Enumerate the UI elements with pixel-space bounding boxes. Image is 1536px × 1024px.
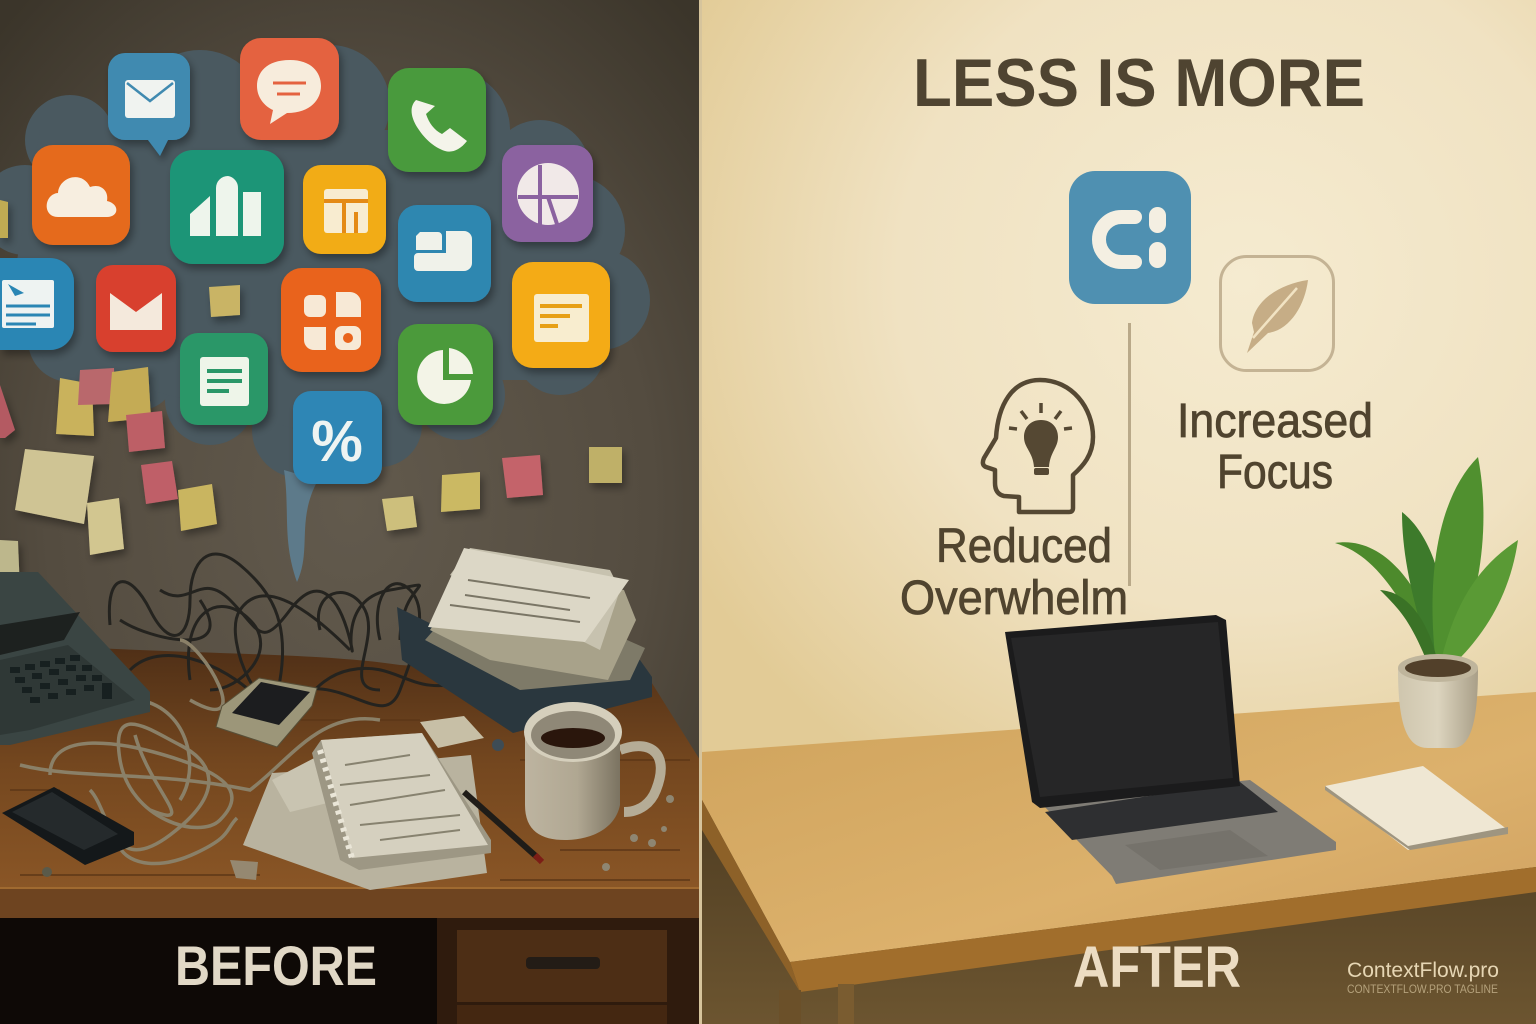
calculator desk phone	[0, 572, 150, 745]
laptop	[1005, 615, 1336, 884]
text: increased focus: Increased	[1177, 395, 1373, 448]
tangled cables	[109, 554, 470, 714]
icon: document left	[0, 258, 74, 350]
icon: phone	[388, 68, 486, 172]
app icons	[0, 38, 610, 484]
sticky notes	[0, 200, 622, 592]
text: increased focus	[1177, 395, 1373, 499]
icon: head with lightbulb	[983, 380, 1093, 512]
icon: purple grid	[502, 145, 593, 242]
text: reduced overwhelm: Reduced	[936, 520, 1112, 573]
title: less is more: LESS IS MORE	[913, 45, 1365, 121]
icon: orange grid	[281, 268, 381, 372]
text: reduced overwhelm: Overwhelm	[900, 572, 1128, 625]
phone: silver device	[216, 678, 317, 747]
icon: yellow document	[512, 262, 610, 368]
icon: blue app logo	[1069, 171, 1191, 304]
text: increased focus: Focus	[1217, 446, 1333, 499]
paper stack on binder	[397, 548, 652, 733]
plant	[1335, 457, 1518, 748]
brand: contextflow.pro: CONTEXTFLOW.PRO TAGLINE	[1347, 982, 1498, 996]
icon: cloud	[32, 145, 130, 245]
title: after: AFTER	[1073, 935, 1241, 1000]
coffee mug	[524, 702, 661, 840]
desk top	[702, 692, 1536, 992]
divider line	[1128, 323, 1131, 586]
desk surface	[0, 640, 700, 920]
panel: after (tidy desk)	[699, 0, 1536, 1024]
icon: chart	[170, 150, 284, 264]
panel: before (cluttered desk)	[0, 0, 700, 1024]
icon: feather tile	[1220, 256, 1334, 370]
thought cloud	[0, 45, 650, 582]
desk crumbs	[42, 739, 674, 877]
icon: mail	[108, 53, 190, 156]
icon: layout	[303, 165, 386, 254]
desk legs	[779, 984, 854, 1024]
pen	[464, 792, 542, 862]
phone: black device	[2, 787, 134, 865]
icon: percent	[293, 391, 382, 484]
loose papers	[230, 716, 487, 890]
spiral notebook	[312, 733, 491, 870]
under-desk area with drawer	[0, 918, 700, 1024]
icon: chat	[240, 38, 339, 140]
icon: pie chart	[398, 324, 493, 425]
brand: contextflow.pro: ContextFlow.pro	[1347, 959, 1499, 982]
text: reduced overwhelm	[900, 520, 1128, 625]
title: before: BEFORE	[175, 934, 377, 997]
icon: green document	[180, 333, 268, 425]
brand: contextflow.pro	[1347, 959, 1499, 996]
icon: blue cards	[398, 205, 491, 302]
icon: red mail	[96, 265, 176, 352]
area under desk	[702, 800, 1536, 1024]
notepad	[1325, 766, 1508, 850]
icon: percent: %	[311, 409, 363, 474]
